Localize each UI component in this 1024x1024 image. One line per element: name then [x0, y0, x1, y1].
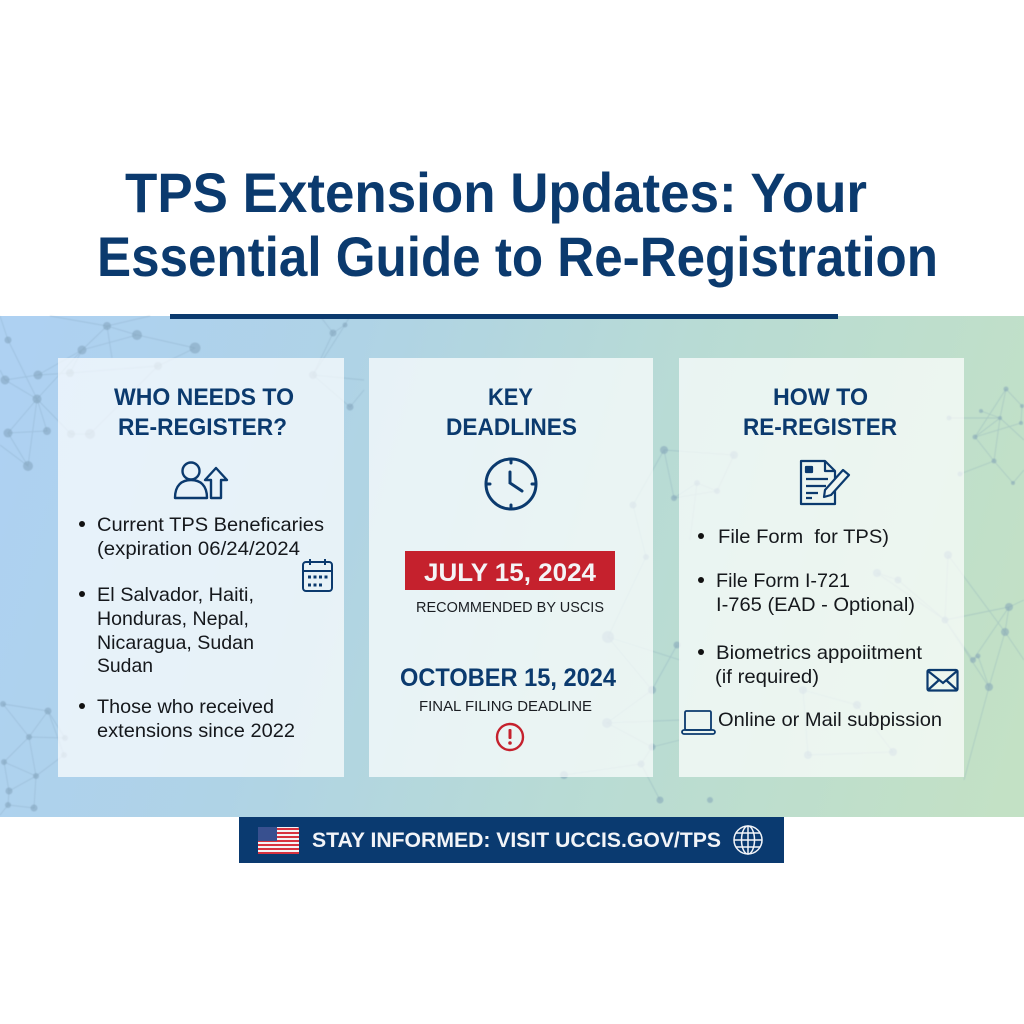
heading: deadlines: [446, 384, 577, 441]
bullet list: how: [698, 526, 942, 731]
icon: calendar: [303, 559, 332, 591]
icon: laptop: [682, 711, 715, 734]
title: [97, 161, 938, 288]
heading: who: RE-REGISTER?: [118, 414, 287, 441]
heading: how: [743, 384, 897, 441]
title: Essential Guide to Re-Registration: [97, 225, 938, 288]
panel: key deadlines: [369, 358, 653, 777]
heading: who: [114, 384, 294, 441]
icon: globe: [734, 826, 762, 854]
bullet list: how: (if required): [715, 666, 819, 688]
bullet list: who: Those who received: [97, 696, 274, 718]
bullet list: who: extensions since 2022: [97, 720, 295, 742]
icon: us flag: [258, 827, 299, 854]
bullet list: who: El Salvador, Haiti,: [97, 584, 254, 606]
panel: how to re-register: [679, 358, 964, 777]
bullet list: who: (expiration 06/24/2024: [97, 538, 300, 560]
bullet list: who: [79, 514, 324, 742]
caption: recommended: RECOMMENDED BY USCIS: [416, 599, 604, 616]
icon: person with arrow: [175, 462, 227, 498]
bullet list: how: Biometrics appoiitment: [716, 642, 923, 664]
heading: who: WHO NEEDS TO: [114, 384, 294, 411]
bullet list: how: File Form for TPS): [718, 526, 889, 548]
bullet list: who: Current TPS Beneficaries: [97, 514, 324, 536]
heading: how: RE-REGISTER: [743, 414, 897, 441]
footer banner: [239, 817, 784, 863]
bullet list: how: Online or Mail subpission: [718, 709, 942, 731]
title: TPS Extension Updates: Your: [125, 161, 867, 224]
icon: alert: [497, 724, 523, 750]
heading: deadlines: KEY: [488, 384, 533, 411]
icon: form and pencil: [801, 461, 849, 504]
date: july 15: JULY 15, 2024: [424, 559, 596, 587]
bullet list: who: Honduras, Nepal,: [97, 608, 249, 630]
caption: final: FINAL FILING DEADLINE: [419, 698, 592, 715]
bullet list: how: I-765 (EAD - Optional): [716, 594, 915, 616]
title underline: [170, 314, 838, 319]
date: july 15: [405, 551, 615, 590]
panel: who needs to re-register: [58, 358, 344, 777]
banner text: STAY INFORMED: VISIT UCCIS.GOV/TPS: [312, 828, 721, 852]
background band: [0, 316, 1024, 817]
icon: envelope: [928, 670, 958, 690]
bullet list: who: Nicaragua, Sudan: [97, 632, 254, 654]
heading: deadlines: DEADLINES: [446, 414, 577, 441]
date: october 15: OCTOBER 15, 2024: [400, 664, 616, 692]
bullet list: who: Sudan: [97, 655, 153, 677]
bullet list: how: File Form I-721: [716, 570, 850, 592]
icon: clock: [486, 459, 536, 509]
heading: how: HOW TO: [773, 384, 868, 411]
